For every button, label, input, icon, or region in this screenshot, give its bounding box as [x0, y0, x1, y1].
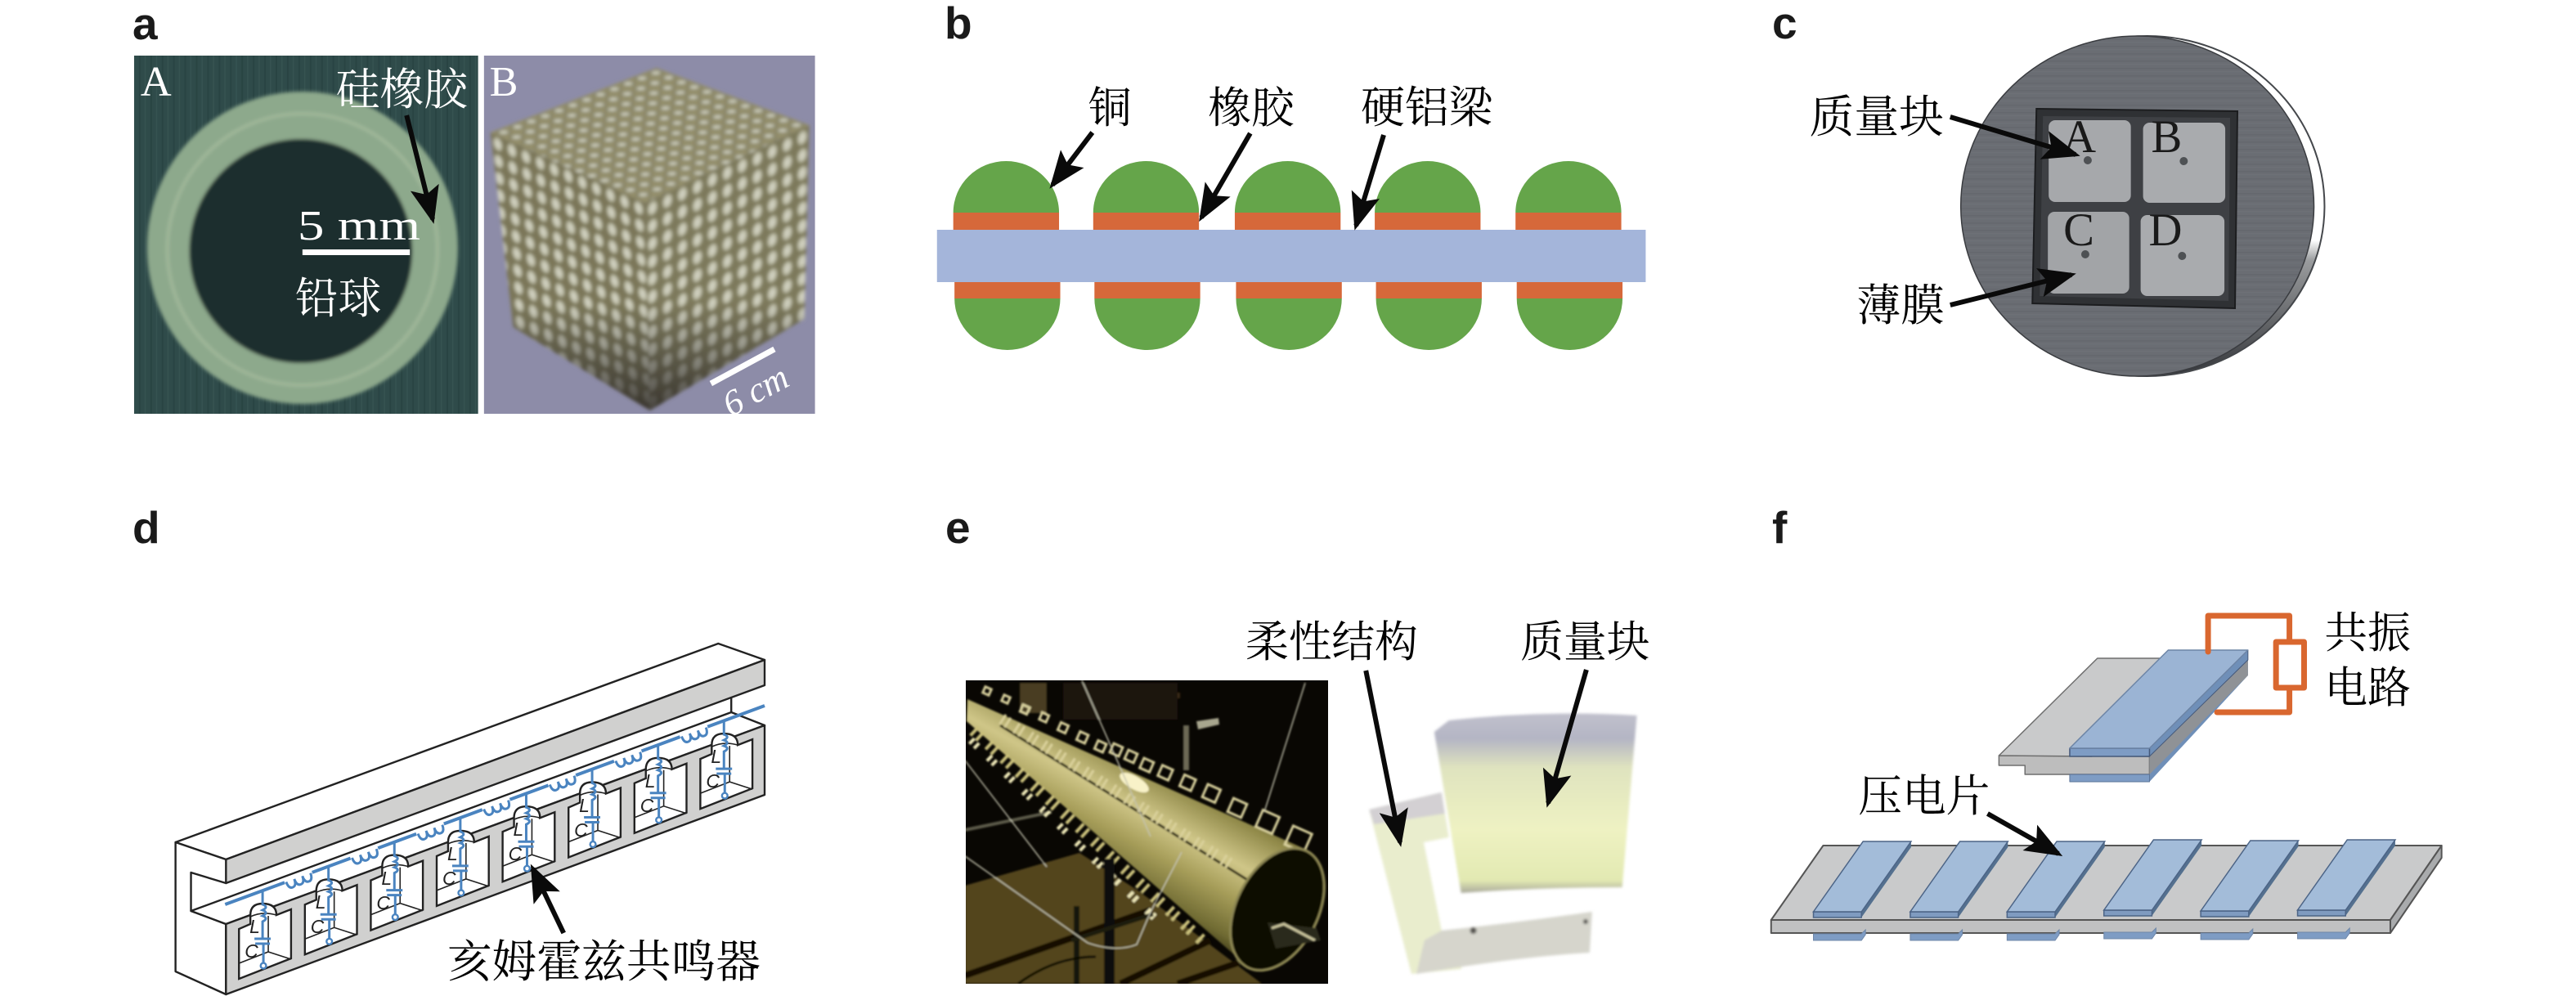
resonator 3 [370, 842, 423, 931]
resonator 1: L [249, 916, 260, 937]
resonator 5: C [509, 843, 523, 864]
panel e: tube with resonators photo and sample [965, 619, 1649, 986]
scale bar [303, 249, 410, 255]
resonator 4 [437, 818, 489, 906]
resonator 5: L [514, 819, 523, 840]
resonator 6 [568, 769, 621, 857]
text: rigid aluminium beam: 硬铝梁 [1361, 83, 1494, 132]
arrow: mass block [1548, 670, 1586, 803]
arrow: rubber [1201, 133, 1250, 218]
text: membrane: 薄膜 [1856, 281, 1945, 330]
panel b: beam with copper and rubber resonators [937, 83, 1645, 350]
resonator 6: L [579, 795, 590, 816]
text: membrane letters: A [2062, 111, 2096, 163]
aluminium beam [937, 230, 1645, 282]
arrow: membrane [1950, 275, 2071, 305]
text: copper: 铜 [1088, 85, 1132, 132]
piezo patch 5 [2201, 841, 2299, 940]
resonator 1: C [245, 940, 258, 962]
text: membrane letters: C [2063, 204, 2094, 256]
arrow: copper [1052, 132, 1093, 185]
panel a: photographs of coated lead sphere and cube lattice [134, 56, 815, 424]
resonator 8: C [706, 770, 720, 792]
sample and its labels [1245, 619, 1649, 974]
text: 5 mm: 5 mm [298, 203, 420, 249]
text: flexible structure: 柔性结构 [1245, 619, 1418, 666]
resonator 2: C [311, 916, 325, 937]
beam body [176, 644, 765, 994]
detail: single piezo unit [1999, 650, 2248, 782]
text: mass block: 质量块 [1520, 619, 1649, 666]
base plate [1771, 846, 2442, 933]
resonator 7 [635, 745, 686, 833]
resonator 3 [1235, 161, 1342, 350]
resonator 4: L [447, 843, 458, 864]
resonator 6: C [574, 819, 588, 841]
resonator 8 [700, 720, 752, 809]
text: 6 cm: 6 cm [716, 357, 795, 424]
arrow: silicone rubber [406, 115, 433, 219]
text: circuit: 电路 [2324, 665, 2411, 712]
text: membrane letters: D [2149, 204, 2183, 256]
series inductors [285, 727, 710, 890]
resonator 5 [503, 793, 554, 882]
arrow: flexible structure [1366, 671, 1400, 842]
text: piezoelectric patch: 压电片 [1858, 772, 1990, 821]
resonator 2: L [316, 891, 325, 913]
label: f: f [1772, 502, 1788, 553]
text: A: A [141, 59, 172, 105]
circuit line [225, 706, 765, 904]
resonator 5 [1515, 161, 1622, 350]
panel d: Helmholtz resonator beam [176, 644, 765, 994]
resonator 7: C [640, 795, 654, 816]
arrow: Helmholtz resonator [532, 868, 563, 933]
arrow: piezoelectric patch [1987, 814, 2058, 854]
arrow: beam [1356, 135, 1384, 226]
text: resonant: 共振 [2324, 610, 2411, 657]
resonator 8: L [711, 746, 721, 767]
label: e: e [945, 502, 971, 553]
text: B: B [490, 59, 518, 105]
resonator 7: L [645, 770, 655, 792]
panel c: membrane with mass blocks on disk [1810, 36, 2324, 376]
disk [1961, 36, 2324, 376]
resonator 4: C [442, 868, 456, 889]
photo B: cube lattice [484, 56, 815, 424]
resonant circuit [2208, 616, 2304, 712]
piezo patch 4 [2104, 840, 2201, 939]
resonator 1 [239, 891, 291, 979]
text: membrane letters: B [2152, 111, 2182, 163]
text: mass block: 质量块 [1810, 92, 1944, 142]
window frame with four membranes [2032, 109, 2237, 308]
piezo patch 2 [1910, 841, 2008, 940]
text: lead sphere: 铅球 [295, 276, 381, 323]
resonator 4 [1375, 161, 1482, 350]
photo: tube with resonators [965, 680, 1344, 986]
arrow: mass block [1950, 117, 2076, 155]
text: Helmholtz resonator: 亥姆霍兹共鸣器 [447, 937, 761, 987]
resonator 2 [305, 866, 357, 954]
text: membrane letters [2062, 111, 2183, 256]
scale bar [711, 349, 774, 384]
resonator 1 [954, 161, 1061, 350]
panel f: piezoelectric patches with resonant circuit [1771, 610, 2442, 940]
photo A: lead sphere in silicone rubber ring [134, 56, 478, 414]
resonator 3: L [381, 868, 392, 889]
resonator 3: C [376, 892, 390, 913]
piezo patch 6 [2298, 840, 2395, 939]
piezo patch 1 [1814, 841, 1911, 940]
piezo patch 3 [2007, 841, 2105, 940]
label: d: d [132, 502, 160, 553]
photo: resonator sample [1369, 714, 1637, 974]
resonator 2 [1093, 161, 1200, 350]
text: silicone rubber: 硅橡胶 [336, 65, 469, 114]
text: rubber: 橡胶 [1208, 85, 1296, 132]
